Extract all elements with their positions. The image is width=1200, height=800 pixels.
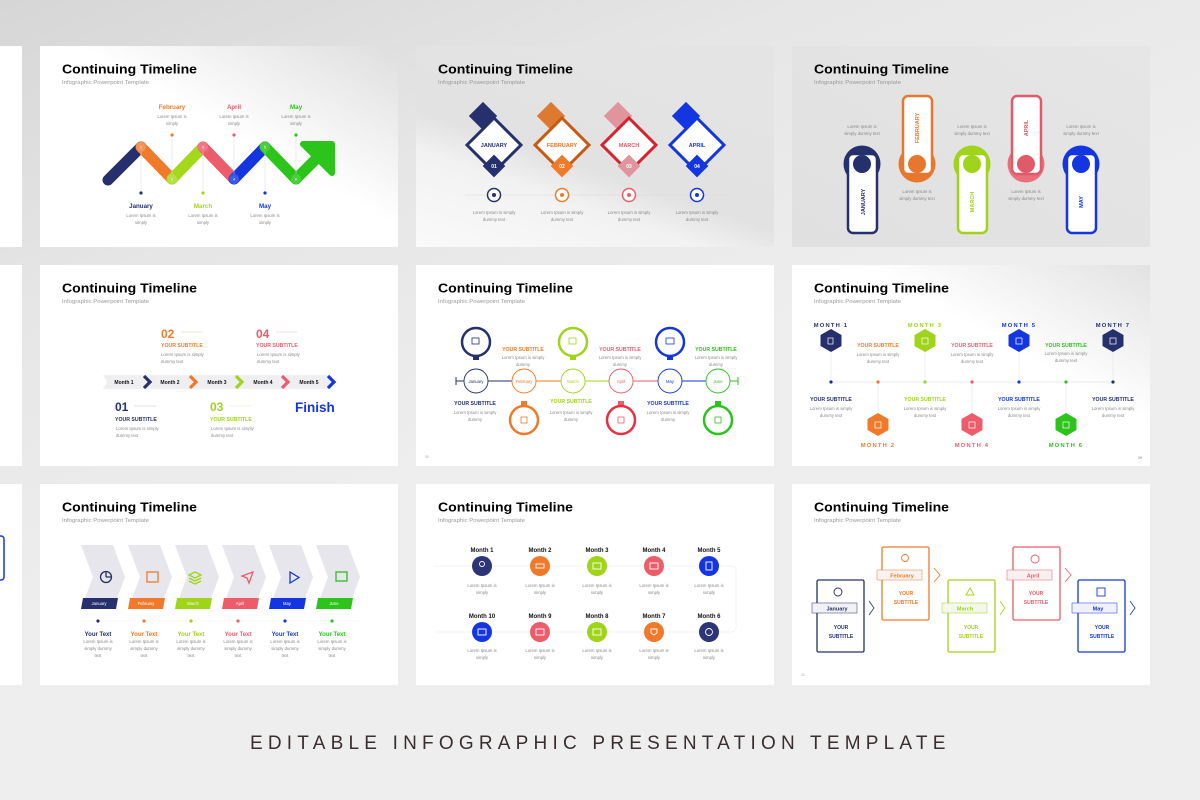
- slide 5: circles timeline: dummy: [516, 362, 531, 367]
- box: May: May: [1093, 606, 1104, 612]
- step 01: YOUR SUBTITLE: [115, 417, 157, 423]
- slide 6: hexagons: YOUR SUBTITLE: [857, 343, 899, 349]
- slide 7: chevrons: [40, 484, 398, 685]
- diamond: February: 02: [559, 164, 565, 170]
- slide 8: ten months: simply: [534, 590, 547, 595]
- box: April: April: [1027, 574, 1040, 580]
- slide 6: hexagons: MONTH 3: [908, 323, 942, 329]
- slide 8: ten months: simply: [476, 655, 489, 660]
- step 03: 03: [210, 400, 224, 414]
- partial slides at left edge: [0, 46, 22, 685]
- slide 5: circles timeline: May: [666, 379, 675, 384]
- slide 1: zigzag timeline: [40, 46, 398, 247]
- slide 3: pills: Infographic Powerpoint Template: [814, 80, 901, 86]
- slide 6: hexagons: Lorem Ipsum is simply: [951, 352, 994, 357]
- slide 7: chevrons: text: [141, 653, 148, 658]
- slide 7: chevrons: March: [187, 601, 199, 606]
- step 01: 01: [115, 400, 129, 414]
- box: February: February: [890, 574, 915, 580]
- slide 2: diamonds: Continuing Timeline: [438, 62, 573, 76]
- slide 6: hexagons: YOUR SUBTITLE: [951, 343, 993, 349]
- slide 1: zigzag timeline: Lorem Ipsum is: [219, 114, 249, 119]
- slide 8: ten months: simply: [648, 655, 661, 660]
- slide 6: hexagons: MONTH 5: [1002, 323, 1036, 329]
- slide 7: chevrons: Infographic Powerpoint Template: [62, 518, 149, 524]
- slide 5: circles timeline: Continuing Timeline: [438, 280, 573, 296]
- box: January: SUBTITLE: [829, 634, 854, 640]
- slide 6: hexagons: MONTH 6: [1049, 443, 1083, 449]
- bottom pins: [510, 401, 732, 434]
- slide 2: diamonds: dummy text: [483, 217, 506, 222]
- box: May: SUBTITLE: [1090, 634, 1115, 640]
- slide 6: hexagons: [792, 265, 1150, 466]
- slide 5: circles timeline: Lorem Ipsum is simply: [695, 355, 738, 360]
- slide 5: circles timeline: dummy: [613, 362, 628, 367]
- slide 2: diamonds: dummy text: [618, 217, 641, 222]
- slide 8: ten months: Continuing Timeline: [438, 500, 573, 514]
- box: March: SUBTITLE: [959, 634, 984, 640]
- slide 7: chevrons: Lorem Ipsum is: [176, 639, 206, 644]
- slide 7: chevrons: April: [236, 601, 244, 606]
- slide 3: pills: [792, 46, 1150, 247]
- slide 6: hexagons: Lorem Ipsum is simply: [1045, 351, 1088, 356]
- slide 8: ten months: Month 7: [642, 614, 666, 620]
- slide 8: ten months: simply: [703, 655, 716, 660]
- slide 8: ten months: Month 5: [698, 548, 721, 554]
- slide 3: pills: Continuing Timeline: [814, 62, 949, 76]
- diamond: April: [670, 102, 724, 177]
- slide 8: ten months: simply: [703, 590, 716, 595]
- slide 5: circles timeline: Lorem Ipsum is simply: [454, 410, 497, 415]
- slide 6: hexagons: Lorem Ipsum is simply: [857, 352, 900, 357]
- slide 8: ten months: simply: [476, 590, 489, 595]
- slide 4: arrow band: Month 3: [207, 380, 227, 386]
- slide 2: diamonds: [416, 46, 774, 247]
- slide 5: circles timeline: March: [567, 379, 579, 384]
- pill: February: [898, 96, 936, 182]
- slide 3: pills: simply dummy text: [844, 131, 881, 136]
- slide 1: zigzag timeline: simply: [290, 121, 303, 126]
- diamond: April: APRIL: [689, 143, 706, 149]
- slide 1: zigzag timeline: Lorem Ipsum is: [157, 114, 187, 119]
- slide 7: chevrons: Your Text: [131, 632, 157, 638]
- slide 8: ten months: Lorem Ipsum is: [582, 648, 612, 653]
- slide 5: circles timeline: YOUR SUBTITLE: [695, 347, 737, 353]
- slide 1: zigzag timeline: February: [159, 104, 186, 111]
- box: January: [812, 580, 874, 652]
- slide 8: ten months: Lorem Ipsum is: [582, 583, 612, 588]
- slide 4: arrow band: [40, 265, 398, 466]
- box: May: YOUR: [1095, 625, 1110, 631]
- pill: January: [844, 146, 880, 233]
- slide 1: zigzag timeline: May: [259, 203, 272, 210]
- slide 1: zigzag timeline: Lorem Ipsum is: [281, 114, 311, 119]
- slide 8: ten months: Lorem Ipsum is: [639, 648, 669, 653]
- box: April: SUBTITLE: [1024, 600, 1049, 606]
- step 04: [256, 327, 301, 364]
- slide 6: hexagons: MONTH 7: [1096, 323, 1130, 329]
- slide 8: ten months: Infographic Powerpoint Template: [438, 518, 525, 524]
- slide 3: pills: simply dummy text: [899, 196, 936, 201]
- slide 2: diamonds: Lorem Ipsum is simply: [608, 210, 651, 215]
- slide 6: hexagons: 29: [1138, 456, 1142, 460]
- slide 7: chevrons: Lorem Ipsum is: [317, 639, 347, 644]
- slide 1: zigzag timeline: 1: [140, 146, 142, 150]
- slide 1: zigzag timeline: Infographic Powerpoint Template: [62, 80, 149, 86]
- slide 6: hexagons: dummy text: [914, 413, 937, 418]
- slide 5: circles timeline: Infographic Powerpoint Template: [438, 299, 525, 305]
- slide 1: zigzag timeline: Continuing Timeline: [62, 62, 197, 76]
- step 04: 04: [256, 327, 270, 341]
- slide 7: chevrons: Continuing Timeline: [62, 500, 197, 514]
- slide 1: zigzag timeline: January: [129, 203, 153, 210]
- slide 8: ten months: Lorem Ipsum is: [694, 583, 724, 588]
- slide 6: hexagons: YOUR SUBTITLE: [998, 397, 1040, 403]
- pill: April: [1008, 96, 1044, 182]
- slide 5: circles timeline: YOUR SUBTITLE: [454, 401, 496, 407]
- slide 3: pills: simply dummy text: [954, 131, 991, 136]
- slide 7: chevrons: text: [235, 653, 242, 658]
- slide 7: chevrons: June: [329, 601, 339, 606]
- step 03: Lorem Ipsum is simply: [211, 426, 255, 431]
- slide 2: diamonds: Lorem Ipsum is simply: [541, 210, 584, 215]
- slide 5: circles timeline: dummy: [661, 417, 676, 422]
- slide 7: chevrons: simply dummy: [271, 646, 300, 651]
- diamond: February: [535, 102, 589, 177]
- slide 6: hexagons: Lorem Ipsum is simply: [998, 406, 1041, 411]
- step 03: dummy text: [211, 433, 234, 438]
- box: January: January: [826, 606, 848, 612]
- slide 8: ten months: Lorem Ipsum is: [525, 583, 555, 588]
- slide 6: hexagons: MONTH 2: [861, 443, 895, 449]
- top pins: [462, 328, 684, 360]
- slide 7: chevrons: text: [282, 653, 289, 658]
- slide 7: chevrons: January: [92, 601, 107, 606]
- diamond: March: MARCH: [619, 143, 639, 149]
- slide 6: hexagons: dummy text: [1055, 358, 1078, 363]
- footer title: EDITABLE INFOGRAPHIC PRESENTATION TEMPLATE: [250, 733, 950, 754]
- slide 2: diamonds: Infographic Powerpoint Template: [438, 80, 525, 86]
- slide 6: hexagons: YOUR SUBTITLE: [904, 397, 946, 403]
- slide 5: circles timeline: [416, 265, 774, 466]
- slide 7: chevrons: simply dummy: [130, 646, 159, 651]
- slide 7: chevrons: simply dummy: [224, 646, 253, 651]
- slide 7: chevrons: May: [283, 601, 292, 606]
- slide 1: zigzag timeline: simply: [197, 220, 210, 225]
- slide 5: circles timeline: January: [469, 379, 484, 384]
- slide 1: zigzag timeline: Lorem Ipsum is: [250, 213, 280, 218]
- slide 6: hexagons: Infographic Powerpoint Template: [814, 299, 901, 305]
- slide 7: chevrons: Your Text: [178, 632, 204, 638]
- slide 8: ten months: Month 4: [642, 548, 666, 554]
- box: March: YOUR: [964, 625, 979, 631]
- slide 6: hexagons: dummy text: [961, 359, 984, 364]
- step 01: [115, 400, 160, 438]
- slide 2: diamonds: dummy text: [686, 217, 709, 222]
- slide 6: hexagons: MONTH 1: [814, 323, 848, 329]
- slide 1: zigzag timeline: Lorem Ipsum is: [188, 213, 218, 218]
- slide 5: circles timeline: YOUR SUBTITLE: [550, 399, 592, 405]
- slide 1: zigzag timeline: May: [290, 104, 303, 111]
- step 02: Lorem Ipsum is simply: [161, 352, 205, 357]
- slide 8: ten months: Month 1: [470, 548, 494, 554]
- box: April: YOUR: [1029, 591, 1044, 597]
- pill: February: FEBRUARY: [915, 112, 921, 143]
- box: January: YOUR: [834, 625, 849, 631]
- slide 5: circles timeline: April: [617, 379, 625, 384]
- slide 1: zigzag timeline: simply: [135, 220, 148, 225]
- slide 7: chevrons: text: [188, 653, 195, 658]
- step 01: dummy text: [116, 433, 139, 438]
- slide 2: diamonds: Lorem Ipsum is simply: [676, 210, 719, 215]
- slide 5: circles timeline: dummy: [468, 417, 483, 422]
- diamond: April: 04: [694, 164, 700, 170]
- slide 1: zigzag timeline: simply: [259, 220, 272, 225]
- slide 8: ten months: simply: [591, 590, 604, 595]
- slide 6: hexagons: dummy text: [1102, 413, 1125, 418]
- slide 8: ten months: Month 9: [528, 614, 552, 620]
- slide 7: chevrons: Your Text: [272, 632, 298, 638]
- slide 1: zigzag timeline: simply: [228, 121, 241, 126]
- slide 6: hexagons: Continuing Timeline: [814, 280, 949, 296]
- slide 8: ten months: Month 2: [528, 548, 552, 554]
- slide 6: hexagons: dummy text: [867, 359, 890, 364]
- slide 2: diamonds: dummy text: [551, 217, 574, 222]
- slide 8: ten months: simply: [534, 655, 547, 660]
- slide 4: arrow band: Month 1: [114, 380, 134, 386]
- diamond: March: 03: [626, 164, 632, 170]
- slide 1: zigzag timeline: 3: [202, 146, 204, 150]
- slide 7: chevrons: Lorem Ipsum is: [83, 639, 113, 644]
- slide 6: hexagons: MONTH 4: [955, 443, 989, 449]
- slide 6: hexagons: YOUR SUBTITLE: [1045, 343, 1087, 349]
- slide 5: circles timeline: Lorem Ipsum is simply: [550, 410, 593, 415]
- box: March: March: [957, 606, 974, 612]
- slide 5: circles timeline: Lorem Ipsum is simply: [647, 410, 690, 415]
- step 02: 02: [161, 327, 175, 341]
- slide 3: pills: simply dummy text: [1008, 196, 1045, 201]
- slide 8: ten months: Month 8: [586, 614, 609, 620]
- pill: March: MARCH: [970, 192, 976, 212]
- slide 1: zigzag timeline: April: [227, 104, 241, 111]
- slide 9: boxes: Continuing Timeline: [814, 500, 949, 514]
- slide 8: ten months: Month 6: [698, 614, 721, 620]
- slide 4: arrow band: Infographic Powerpoint Template: [62, 299, 149, 305]
- slide 3: pills: Lorem Ipsum is: [1066, 124, 1096, 129]
- pill: May: [1062, 146, 1100, 233]
- pill: January: JANUARY: [861, 188, 867, 215]
- slide 5: circles timeline: Lorem Ipsum is simply: [502, 355, 545, 360]
- zigzag chart: [108, 147, 324, 180]
- diamond: January: JANUARY: [481, 143, 508, 149]
- slide 3: pills: Lorem Ipsum is: [902, 189, 932, 194]
- icons: [100, 572, 347, 584]
- slide 4: arrow band: Month 5: [299, 380, 319, 386]
- diamond: January: [467, 102, 521, 177]
- slide 3: pills: Lorem Ipsum is: [1011, 189, 1041, 194]
- slide 5: circles timeline: dummy: [709, 362, 724, 367]
- slide 5: circles timeline: June: [713, 379, 723, 384]
- slide 5: circles timeline: dummy: [564, 417, 579, 422]
- step 03: YOUR SUBTITLE: [210, 417, 252, 423]
- slide 7: chevrons: Lorem Ipsum is: [270, 639, 300, 644]
- pill: May: MAY: [1079, 196, 1085, 208]
- diamond: February: FEBRUARY: [547, 143, 578, 149]
- step 02: dummy text: [161, 359, 184, 364]
- slide 1: zigzag timeline: 5: [264, 146, 266, 150]
- slide 1: zigzag timeline: Lorem Ipsum is: [126, 213, 156, 218]
- box: February: SUBTITLE: [894, 600, 919, 606]
- slide 1: zigzag timeline: 6: [295, 178, 297, 182]
- box: April: [1007, 547, 1071, 620]
- box: March: [942, 580, 1005, 652]
- slide 8: ten months: [416, 484, 774, 685]
- slide 1: zigzag timeline: 2: [171, 178, 173, 182]
- slide 5: circles timeline: YOUR SUBTITLE: [502, 347, 544, 353]
- slide 9: boxes: [792, 484, 1150, 685]
- box: February: [877, 547, 940, 620]
- slide 6: hexagons: Lorem Ipsum is simply: [810, 406, 853, 411]
- box: February: YOUR: [899, 591, 914, 597]
- slide 7: chevrons: Lorem Ipsum is: [129, 639, 159, 644]
- slide 7: chevrons: Your Text: [319, 632, 345, 638]
- slide 5: circles timeline: February: [516, 379, 533, 384]
- slide 3: pills: Lorem Ipsum is: [847, 124, 877, 129]
- slide 9: boxes: 31: [801, 673, 805, 677]
- slide 8: ten months: Lorem Ipsum is: [525, 648, 555, 653]
- slide 7: chevrons: text: [329, 653, 336, 658]
- slide 7: chevrons: February: [138, 601, 155, 606]
- box: May: [1072, 580, 1135, 652]
- slide 8: ten months: Lorem Ipsum is: [639, 583, 669, 588]
- slide 6: hexagons: dummy text: [1008, 413, 1031, 418]
- slide 4: arrow band: Month 2: [160, 380, 180, 386]
- slide 6: hexagons: Lorem Ipsum is simply: [1092, 406, 1135, 411]
- slide 8: ten months: simply: [648, 590, 661, 595]
- slide 7: chevrons: Your Text: [85, 632, 111, 638]
- slide 9: boxes: Infographic Powerpoint Template: [814, 518, 901, 524]
- step 04: YOUR SUBTITLE: [256, 343, 298, 349]
- step 02: [161, 327, 205, 364]
- step 03: [210, 400, 255, 438]
- slide 1: zigzag timeline: 4: [233, 178, 235, 182]
- pill: April: APRIL: [1024, 119, 1030, 136]
- slide 6: hexagons: YOUR SUBTITLE: [1092, 397, 1134, 403]
- slide 7: chevrons: simply dummy: [318, 646, 347, 651]
- slide 6: hexagons: YOUR SUBTITLE: [810, 397, 852, 403]
- slide 1: zigzag timeline: simply: [166, 121, 179, 126]
- step 04: dummy text: [257, 359, 280, 364]
- slide 5: circles timeline: 30: [425, 455, 429, 459]
- slide 7: chevrons: text: [95, 653, 102, 658]
- slide 8: ten months: Lorem Ipsum is: [467, 648, 497, 653]
- slide 7: chevrons: Your Text: [225, 632, 251, 638]
- slide 8: ten months: Lorem Ipsum is: [694, 648, 724, 653]
- diamond: March: [602, 102, 656, 177]
- slide 6: hexagons: Lorem Ipsum is simply: [904, 406, 947, 411]
- slide 4: arrow band: Month 4: [253, 380, 273, 386]
- slide 2: diamonds: Lorem Ipsum is simply: [473, 210, 516, 215]
- slide 3: pills: simply dummy text: [1063, 131, 1100, 136]
- slide 8: ten months: simply: [591, 655, 604, 660]
- step 04: Lorem Ipsum is simply: [257, 352, 301, 357]
- finish: Finish: [295, 400, 335, 415]
- slide 5: circles timeline: YOUR SUBTITLE: [599, 347, 641, 353]
- slide 7: chevrons: simply dummy: [84, 646, 113, 651]
- slide 8: ten months: Month 3: [586, 548, 609, 554]
- diamond: January: 01: [491, 164, 497, 170]
- slide 5: circles timeline: YOUR SUBTITLE: [647, 401, 689, 407]
- slide 8: ten months: Lorem Ipsum is: [467, 583, 497, 588]
- slide 5: circles timeline: Lorem Ipsum is simply: [599, 355, 642, 360]
- step 01: Lorem Ipsum is simply: [116, 426, 160, 431]
- step 02: YOUR SUBTITLE: [161, 343, 203, 349]
- slide 7: chevrons: simply dummy: [177, 646, 206, 651]
- slide 4: arrow band: Continuing Timeline: [62, 280, 197, 296]
- slide 3: pills: Lorem Ipsum is: [957, 124, 987, 129]
- slide 8: ten months: Month 10: [469, 614, 496, 620]
- pill: March: [954, 146, 990, 233]
- slide 6: hexagons: dummy text: [820, 413, 843, 418]
- slide 1: zigzag timeline: March: [194, 203, 212, 210]
- slide 7: chevrons: Lorem Ipsum is: [223, 639, 253, 644]
- hexagons: [820, 329, 1124, 436]
